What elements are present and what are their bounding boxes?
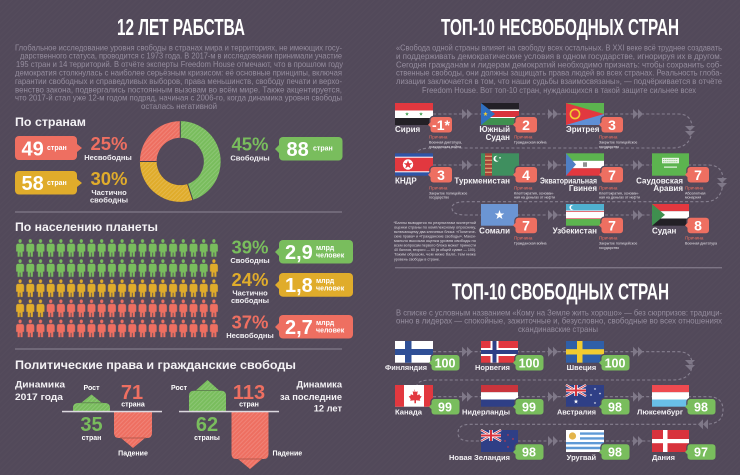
callout: 88 стран свободны: Свободны: [230, 154, 270, 163]
country: Канада: [395, 385, 460, 416]
callout: 88 стран свободны: 45%: [231, 134, 269, 155]
intro text: несвободные страны: и поддерживать демократические условия в одном государстве, игнорируя их в другом.: [396, 52, 722, 61]
country: Туркменистан: [454, 153, 555, 199]
people pictogram grid: [15, 239, 219, 339]
footnote: оценки страны по комплексному опроснику,: [394, 226, 476, 230]
footnote: включающему два ключевых блока: «Политиче-: [394, 230, 477, 234]
country: Туркменистан: ная на деньгах от нефти: [514, 195, 555, 199]
country: Новая Зеландия: Новая Зеландия: [449, 453, 510, 462]
country: Южный Судан: Южный: [479, 125, 510, 134]
country: Сирия: Причина: [429, 135, 448, 140]
country: Швеция: 100: [605, 356, 625, 370]
callout: 58 стран частично свободны: Частично: [91, 188, 127, 197]
intro text block: осталась негативной: [141, 102, 217, 111]
chart: динамика за 12 лет: Рост: [171, 385, 188, 392]
chart: динамика за 12 лет: Падение: [272, 451, 302, 458]
country: Узбекистан: государство: [599, 246, 619, 250]
country: Экваториальная Гвинея: [540, 153, 640, 199]
chart: динамика за 12 лет: [171, 380, 302, 469]
country: Судан: Судан: [652, 226, 677, 235]
footnote: *Баллы выводятся по результатам экспертной: [394, 221, 476, 225]
callout: 49 стран несвободны: 49: [22, 138, 44, 160]
callout: 1,8 млрд частично свободны: Частично: [232, 289, 268, 298]
country: Узбекистан: Причина: [599, 235, 618, 240]
heading: по населению планеты: По населению планеты: [15, 220, 158, 234]
chart: динамика 2017 года: 35: [80, 414, 103, 436]
callout: 2,7 млрд несвободны: 37%: [231, 311, 269, 332]
intro text block: Глобальное исследование уровня свободы в странах мира и территориях, не имеющих госу-: [15, 44, 342, 52]
callout: 88 стран свободны: [230, 134, 342, 163]
callout: 2,7 млрд несвободны: человек: [316, 327, 345, 334]
country: Судан: [652, 204, 717, 245]
callout: 49 стран несвободны: [15, 133, 132, 162]
intro text: несвободные страны: лизации заключается в том, что наши судьбы взаимосвязаны», — подчёркивается в отчёте: [396, 77, 722, 86]
footnote: [394, 221, 477, 261]
intro text block: [15, 44, 344, 111]
callout: 49 стран несвободны: Несвободны: [84, 153, 132, 162]
chart: динамика 2017 года: стран: [82, 435, 101, 442]
route: свободные страны: [417, 347, 723, 446]
country: Южный Судан: 2: [522, 117, 530, 133]
country: Экваториальная Гвинея: Клептократия, основан-: [599, 191, 639, 195]
intro text: свободные страны: скандинавские страны: [518, 325, 598, 334]
country: Уругвай: Уругвай: [567, 453, 596, 462]
country: Норвегия: [475, 341, 544, 372]
country: Южный Судан: Причина: [514, 135, 533, 140]
intro text: свободные страны: онно в лидерах — спокойные, зажиточные и, безусловно, свободные во всех отношениях: [396, 317, 722, 326]
footnote: Таким образом, чем ниже балл, тем ниже: [394, 253, 476, 257]
country: Экваториальная Гвинея: Экваториальная: [540, 176, 597, 185]
intro text block: гарантии свободных и справедливых выборов, права меньшинств, свободу печати и верхо-: [15, 77, 342, 86]
callout: 1,8 млрд частично свободны: [231, 269, 353, 305]
country: Австралия: 98: [608, 400, 622, 414]
country: Эритрея: Закрытое полицейское: [599, 141, 637, 145]
country: Нидерланды: [462, 385, 544, 416]
intro text block: демократия столкнулась с наиболее серьёзным кризисом: её основные принципы, включая: [15, 69, 342, 78]
country: Саудовская Аравия: Абсолютная: [685, 191, 706, 195]
country: Узбекистан: Закрытое полицейское: [599, 241, 637, 245]
country: Сомали: 7: [522, 218, 530, 234]
chart: динамика за 12 лет: стран: [239, 402, 259, 409]
intro text block: венство закона, подвергались постоянным вызовам во всём мире. Также акцентируется,: [15, 85, 342, 94]
callout: 2,9 млрд свободны: [230, 236, 353, 265]
country: Сомали: Гражданская война: [514, 241, 546, 245]
intro text block: 195 стран и 14 территорий. В отчёте эксперты Freedom House отмечают, что в прошлом году: [16, 60, 344, 69]
country: Узбекистан: Узбекистан: [553, 226, 597, 235]
callout: 2,7 млрд несвободны: 2,7: [285, 317, 313, 339]
chart: динамика за 12 лет: страны: [194, 435, 220, 442]
country: Сирия: Сирия: [395, 125, 420, 134]
country: Дания: Дания: [652, 453, 675, 462]
intro text block: дарственного статуса, проводится с 1973 года. В 2017-м в исследовании принимали участие: [20, 52, 342, 61]
callout: 2,9 млрд свободны: Свободны: [230, 256, 270, 265]
country: Туркменистан: 4: [522, 167, 530, 183]
country: Дания: [652, 430, 716, 462]
country: Финляндия: 100: [435, 356, 455, 370]
country: Люксембург: 98: [694, 400, 708, 414]
chart: динамика за 12 лет: 113: [233, 382, 265, 404]
callout: 1,8 млрд частично свободны: человек: [316, 285, 345, 292]
label: динамика за последние 12 лет: [280, 380, 343, 414]
callout: 1,8 млрд частично свободны: 1,8: [285, 275, 313, 297]
country: Швеция: [566, 341, 630, 372]
country: Экваториальная Гвинея: 7: [608, 167, 616, 183]
callout: 2,7 млрд несвободны: млрд: [316, 320, 335, 327]
callout: 2,9 млрд свободны: 2,9: [285, 242, 313, 264]
callout: 2,9 млрд свободны: 39%: [231, 236, 269, 257]
country: Уругвай: [566, 430, 630, 462]
chart: динамика 2017 года: Падение: [118, 451, 148, 458]
chart: динамика 2017 года: страна: [121, 402, 145, 409]
callout: 2,9 млрд свободны: человек: [316, 252, 345, 259]
country: КНДР: [395, 153, 467, 199]
country: Канада: Канада: [395, 407, 423, 416]
country: КНДР: 3: [437, 167, 445, 183]
country: Нидерланды: Нидерланды: [462, 407, 510, 416]
country: Саудовская Аравия: монархия: [685, 195, 701, 199]
intro text: свободные страны: В списке с условным названием «Кому на Земле жить хорошо» — без сюрпризов: традици-: [396, 308, 722, 317]
country: Саудовская Аравия: Саудовская: [636, 176, 683, 185]
country: Эритрея: 3: [608, 117, 616, 133]
country: Туркменистан: Туркменистан: [454, 176, 510, 185]
country: Швеция: Швеция: [567, 363, 596, 372]
footnote: уровень свободы в стране.: [394, 257, 440, 261]
country: Туркменистан: Клептократия, основан-: [514, 191, 554, 195]
country: Финляндия: Финляндия: [385, 363, 427, 372]
intro text: несвободные страны: Freedom House. Вот топ-10 стран, нуждающихся в такой защите сильнее всех: [422, 86, 696, 95]
country: КНДР: КНДР: [395, 176, 417, 185]
country: Эритрея: Эритрея: [566, 125, 600, 134]
intro text: несвободные страны: ственные свободы, они должны защищать права людей во всех странах. Реальность глоба-: [396, 69, 722, 78]
callout: 88 стран свободны: стран: [313, 146, 333, 152]
chart: динамика 2017 года: 71: [121, 382, 143, 404]
heading: политические права: Политические права и гражданские свободы: [15, 358, 296, 372]
country: Финляндия: [385, 341, 460, 372]
country: Сирия: гражданская война: [429, 145, 461, 149]
chart: динамика за 12 лет: 62: [196, 414, 218, 436]
intro text: несвободные страны: [396, 44, 722, 95]
country: Сирия: [395, 103, 462, 149]
callout: 1,8 млрд частично свободны: 24%: [231, 269, 269, 290]
callout: 2,7 млрд несвободны: Несвободны: [226, 331, 274, 340]
country: Сирия: Военная диктатура,: [429, 141, 462, 145]
country: Судан: 8: [694, 218, 702, 234]
country: Норвегия: 100: [519, 356, 539, 370]
callout: 88 стран свободны: 88: [286, 139, 309, 161]
footnote: мально высокая оценка уровня свободы по: [394, 239, 476, 243]
callout: 1,8 млрд частично свободны: млрд: [316, 278, 335, 285]
country: Уругвай: 98: [608, 446, 622, 460]
label: динамика за последние 12 лет: 12 лет: [314, 404, 342, 414]
label: динамика 2017 года: [15, 380, 66, 402]
callout: 2,9 млрд свободны: млрд: [316, 245, 335, 252]
country: Туркменистан: Причина: [514, 185, 533, 190]
title: 12 лет рабства: 12 ЛЕТ РАБСТВА: [117, 14, 245, 40]
country: Эритрея: государство: [599, 145, 619, 149]
country: Дания: 97: [694, 446, 708, 460]
country: Саудовская Аравия: Аравия: [653, 184, 683, 193]
country: Нидерланды: 99: [522, 400, 536, 414]
country: Эритрея: [566, 103, 637, 149]
country: Судан: Военная диктатура: [685, 241, 717, 245]
footnote: всем вопросам первого блока может принести: [394, 243, 476, 247]
intro text: несвободные страны: Сегодня гражданам и лидерам демократий необходимо признать: чтобы сохранить соб-: [396, 60, 722, 69]
footnote: ские права» и «Гражданские свободы». Макси-: [394, 234, 477, 238]
country: Узбекистан: [553, 204, 637, 250]
country: Южный Судан: Судан: [486, 133, 510, 142]
heading: по странам: По странам: [15, 115, 86, 129]
callout: 58 стран частично свободны: стран: [47, 180, 67, 187]
country: Экваториальная Гвинея: Гвинея: [569, 184, 597, 193]
callout: 58 стран частично свободны: [15, 168, 128, 205]
label: динамика 2017 года: Динамика: [15, 380, 66, 390]
intro text block: что 2017-й стал уже 12-м годом подряд, начиная с 2006-го, когда динамика уровня свободы: [15, 94, 342, 103]
country: Норвегия: Норвегия: [475, 363, 510, 372]
country: Саудовская Аравия: 7: [694, 167, 702, 183]
chart: динамика 2017 года: Рост: [84, 385, 100, 392]
country: Южный Судан: Гражданская война: [514, 141, 546, 145]
country: Канада: 99: [438, 400, 452, 414]
country: КНДР: Закрытое полицейское: [429, 191, 467, 195]
callout: 58 стран частично свободны: свободны: [90, 196, 128, 205]
country: Эритрея: Причина: [599, 135, 618, 140]
label: динамика за последние 12 лет: за последние: [280, 392, 342, 402]
chart: динамика 2017 года: [62, 382, 162, 458]
callout: 58 стран частично свободны: 30%: [90, 168, 128, 189]
country: Австралия: Австралия: [557, 407, 596, 416]
label: динамика за последние 12 лет: Динамика: [296, 380, 343, 390]
country: Саудовская Аравия: [636, 153, 709, 199]
country: Экваториальная Гвинея: Причина: [599, 185, 618, 190]
callout: 58 стран частично свободны: 58: [22, 173, 44, 195]
country: Новая Зеландия: [449, 430, 544, 462]
country: Саудовская Аравия: Причина: [685, 185, 704, 190]
route: несвободные страны: [417, 109, 727, 220]
country: Сирия: -1*: [432, 117, 450, 133]
country: Люксембург: Люксембург: [637, 407, 683, 416]
country: Экваториальная Гвинея: ная на деньгах от нефти: [599, 195, 640, 199]
label: динамика 2017 года: 2017 года: [15, 392, 64, 402]
country: Судан: Причина: [685, 235, 704, 240]
country: Люксембург: [637, 385, 716, 416]
callout: 49 стран несвободны: стран: [47, 145, 67, 152]
country: Австралия: [557, 385, 630, 416]
country: КНДР: государство: [429, 195, 449, 199]
callout: 2,7 млрд несвободны: [226, 311, 353, 340]
footnote: 40 баллов, второго — 60 (в общей сумме — 100).: [394, 248, 476, 252]
country: Новая Зеландия: 98: [522, 446, 536, 460]
callout: 49 стран несвободны: 25%: [90, 133, 128, 154]
country: КНДР: Причина: [429, 185, 448, 190]
country: Сомали: [479, 204, 546, 245]
donut chart: [140, 121, 221, 202]
country: Сомали: Причина: [514, 235, 533, 240]
callout: 1,8 млрд частично свободны: свободны: [231, 296, 269, 305]
country: Узбекистан: 7: [608, 218, 616, 234]
country: Сомали: Сомали: [479, 226, 510, 235]
country: Южный Судан: [479, 103, 546, 145]
intro text: свободные страны: [396, 308, 722, 334]
